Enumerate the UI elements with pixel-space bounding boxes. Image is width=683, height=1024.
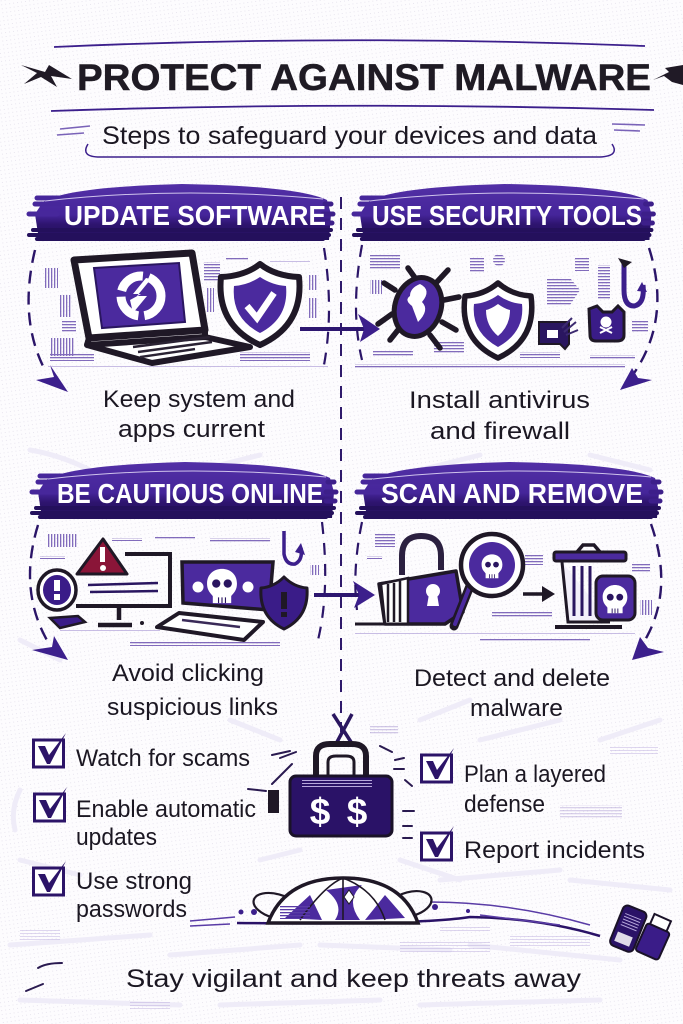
checkbox item: watch for scams — [34, 733, 250, 772]
banner: be cautious online — [32, 462, 336, 518]
icon: globe with swoosh — [190, 878, 600, 936]
icon: trash with skull — [554, 545, 635, 627]
caption: keep system — [103, 386, 295, 443]
caption: keep system: apps current — [118, 416, 265, 443]
icon: lock badge — [589, 306, 624, 341]
icon: usb drives — [609, 904, 675, 960]
dashed arc arrow left — [30, 525, 68, 660]
dashed arc arrow right — [620, 248, 657, 390]
subtitle: Steps to safeguard your devices and data — [102, 122, 597, 150]
caption: install antivirus: Install antivirus — [409, 387, 590, 414]
title bottom rule — [51, 106, 654, 111]
caption: detect and delete — [414, 665, 610, 722]
checkbox item: enable automatic updates — [34, 787, 256, 851]
icon: ransom padlock with dollars: $ — [310, 791, 331, 832]
icon: magnifier with skull — [454, 534, 523, 626]
panel: scan and remove — [355, 462, 664, 660]
subtitle — [57, 122, 645, 157]
panel: security tools — [354, 184, 657, 390]
caption: detect and delete: malware — [470, 695, 563, 722]
texture hatch — [355, 254, 648, 368]
title text: PROTECT AGAINST MALWARE — [77, 57, 651, 98]
caption: avoid clicking — [107, 660, 278, 721]
banner: update software — [29, 184, 333, 240]
icon: chat bubble — [539, 318, 578, 349]
checkbox item: plan a layered defense: Plan a layered — [464, 761, 606, 788]
title top rule — [54, 40, 645, 47]
icon: fish hook — [284, 531, 305, 564]
icon: left lightning bolt — [21, 65, 72, 87]
checkbox item: use strong passwords: Use strong — [76, 868, 192, 895]
checkbox item: report incidents: Report incidents — [464, 837, 645, 864]
icon: padlock — [355, 536, 463, 624]
arrow: update to tools — [300, 314, 380, 342]
caption: install antivirus: and firewall — [430, 418, 570, 445]
icon: bug — [378, 268, 459, 348]
caption: keep system: Keep system and — [103, 386, 295, 413]
panel: update software — [29, 184, 333, 392]
caption: detect and delete: Detect and delete — [414, 665, 610, 692]
title block — [21, 40, 683, 111]
caption: install antivirus — [409, 387, 590, 445]
footer accent strokes — [26, 963, 62, 991]
icon: fish hook — [618, 258, 647, 306]
caption: avoid clicking: Avoid clicking — [112, 660, 264, 687]
dashed arc arrow right — [632, 524, 664, 660]
checkbox item: plan a layered defense: defense — [464, 791, 545, 818]
subtitle underline bracket — [86, 144, 614, 157]
checkbox item: plan a layered defense — [422, 748, 606, 818]
icon: keyboard — [157, 613, 263, 640]
arrow: cautious to scan — [314, 581, 375, 608]
banner: scan and remove — [357, 462, 661, 518]
banner: scan and remove: SCAN AND REMOVE — [381, 478, 643, 509]
footer tagline: Stay vigilant and keep threats away — [126, 965, 582, 993]
icon: laptop with skull — [182, 562, 273, 610]
texture hatch — [44, 258, 328, 368]
banner: use security tools — [354, 184, 653, 240]
icon: warning triangle — [77, 539, 127, 574]
icon: ransom padlock with dollars — [248, 714, 414, 838]
checklist: right — [422, 748, 645, 864]
checkbox item: enable automatic updates: Enable automatic — [76, 796, 256, 823]
banner: use security tools: USE SECURITY TOOLS — [372, 200, 642, 231]
checkbox item: use strong passwords: passwords — [76, 896, 187, 923]
icon: alert circle — [38, 570, 76, 610]
texture hatch — [355, 534, 652, 641]
icon: laptop with refresh — [74, 253, 250, 363]
texture hatch — [40, 534, 319, 646]
icon: shield alert — [261, 577, 307, 629]
subtitle accent dashes — [57, 124, 645, 135]
central dashed connector — [340, 197, 342, 732]
icon: monitor — [76, 554, 170, 625]
checkbox item: watch for scams: Watch for scams — [76, 745, 250, 772]
icon: right lightning bolt — [653, 65, 683, 85]
icon: shield with check — [220, 264, 300, 345]
icon: shield — [464, 283, 532, 358]
banner: update software: UPDATE SOFTWARE — [64, 200, 326, 231]
panel: be cautious — [30, 462, 336, 660]
caption: avoid clicking: suspicious links — [107, 694, 278, 721]
checkbox item: enable automatic updates: updates — [76, 824, 157, 851]
checklist: left — [34, 733, 256, 923]
icon: ransom padlock with dollars: $ — [347, 791, 368, 832]
checkbox item: use strong passwords — [34, 861, 192, 923]
banner: be cautious online: BE CAUTIOUS ONLINE — [57, 478, 323, 509]
dashed arc arrow left — [29, 250, 68, 392]
arrow: scan to trash — [523, 586, 555, 602]
checkbox item: report incidents — [422, 826, 645, 864]
icon: small device — [50, 616, 85, 628]
